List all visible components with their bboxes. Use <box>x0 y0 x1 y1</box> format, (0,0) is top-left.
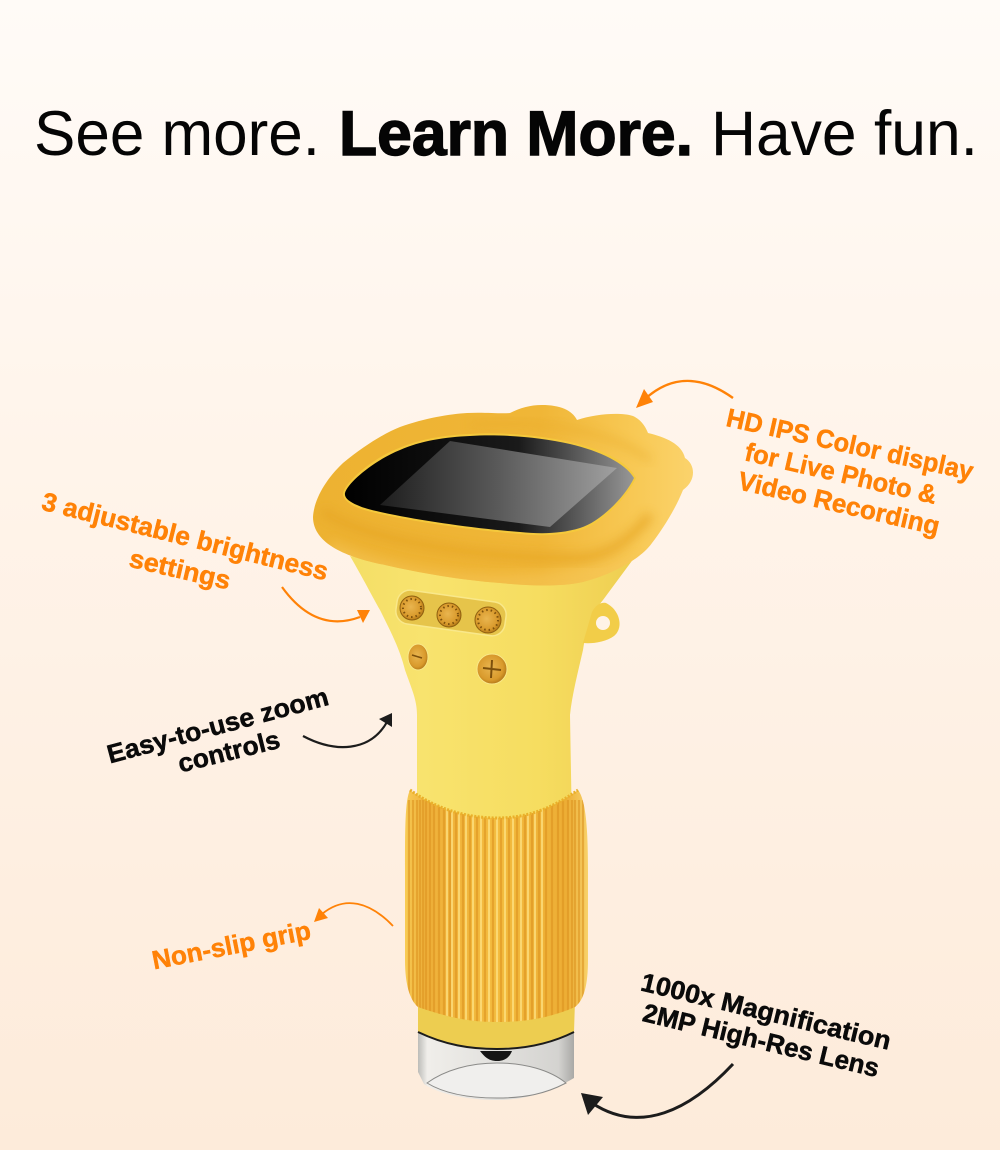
arrow: to display <box>636 381 733 408</box>
callout: brightness <box>39 486 370 623</box>
label: display text: for Live Photo & <box>742 437 940 510</box>
callout: grip <box>149 903 393 975</box>
title: Learn More. <box>339 99 693 169</box>
label: brightness text: 3 adjustable brightness <box>39 486 331 586</box>
label: zoom text: controls <box>175 724 283 778</box>
label: display text: Video Recording <box>735 465 943 541</box>
clear lens cap <box>418 1032 574 1100</box>
label: lens text: 2MP High-Res Lens <box>640 997 882 1083</box>
product: kids digital microscope <box>313 405 693 1100</box>
lens collar <box>418 1000 575 1048</box>
label: display text <box>724 402 977 541</box>
arrow: to zoom buttons <box>303 713 392 747</box>
label: display text: HD IPS Color display <box>724 402 977 486</box>
label: grip text: Non-slip grip <box>149 915 313 975</box>
arrow: to buttons <box>282 587 370 623</box>
screen <box>343 433 636 535</box>
handle body <box>350 550 640 830</box>
callout: display <box>636 381 977 541</box>
label: zoom text: Easy-to-use zoom <box>104 681 332 769</box>
callout: lens <box>581 967 894 1117</box>
label: lens text: 1000x Magnification <box>638 967 894 1056</box>
arrow: to lens <box>581 1064 733 1117</box>
callout: zoom controls <box>104 681 392 778</box>
arrow: to grip <box>314 903 393 926</box>
label: brightness text: settings <box>126 543 234 595</box>
title: Have fun. <box>711 99 978 169</box>
hanging loop <box>583 603 620 643</box>
ribbed grip <box>405 790 588 1030</box>
title <box>34 99 978 169</box>
control buttons <box>394 589 508 684</box>
head rim <box>313 405 693 600</box>
title: See more. <box>34 99 320 169</box>
